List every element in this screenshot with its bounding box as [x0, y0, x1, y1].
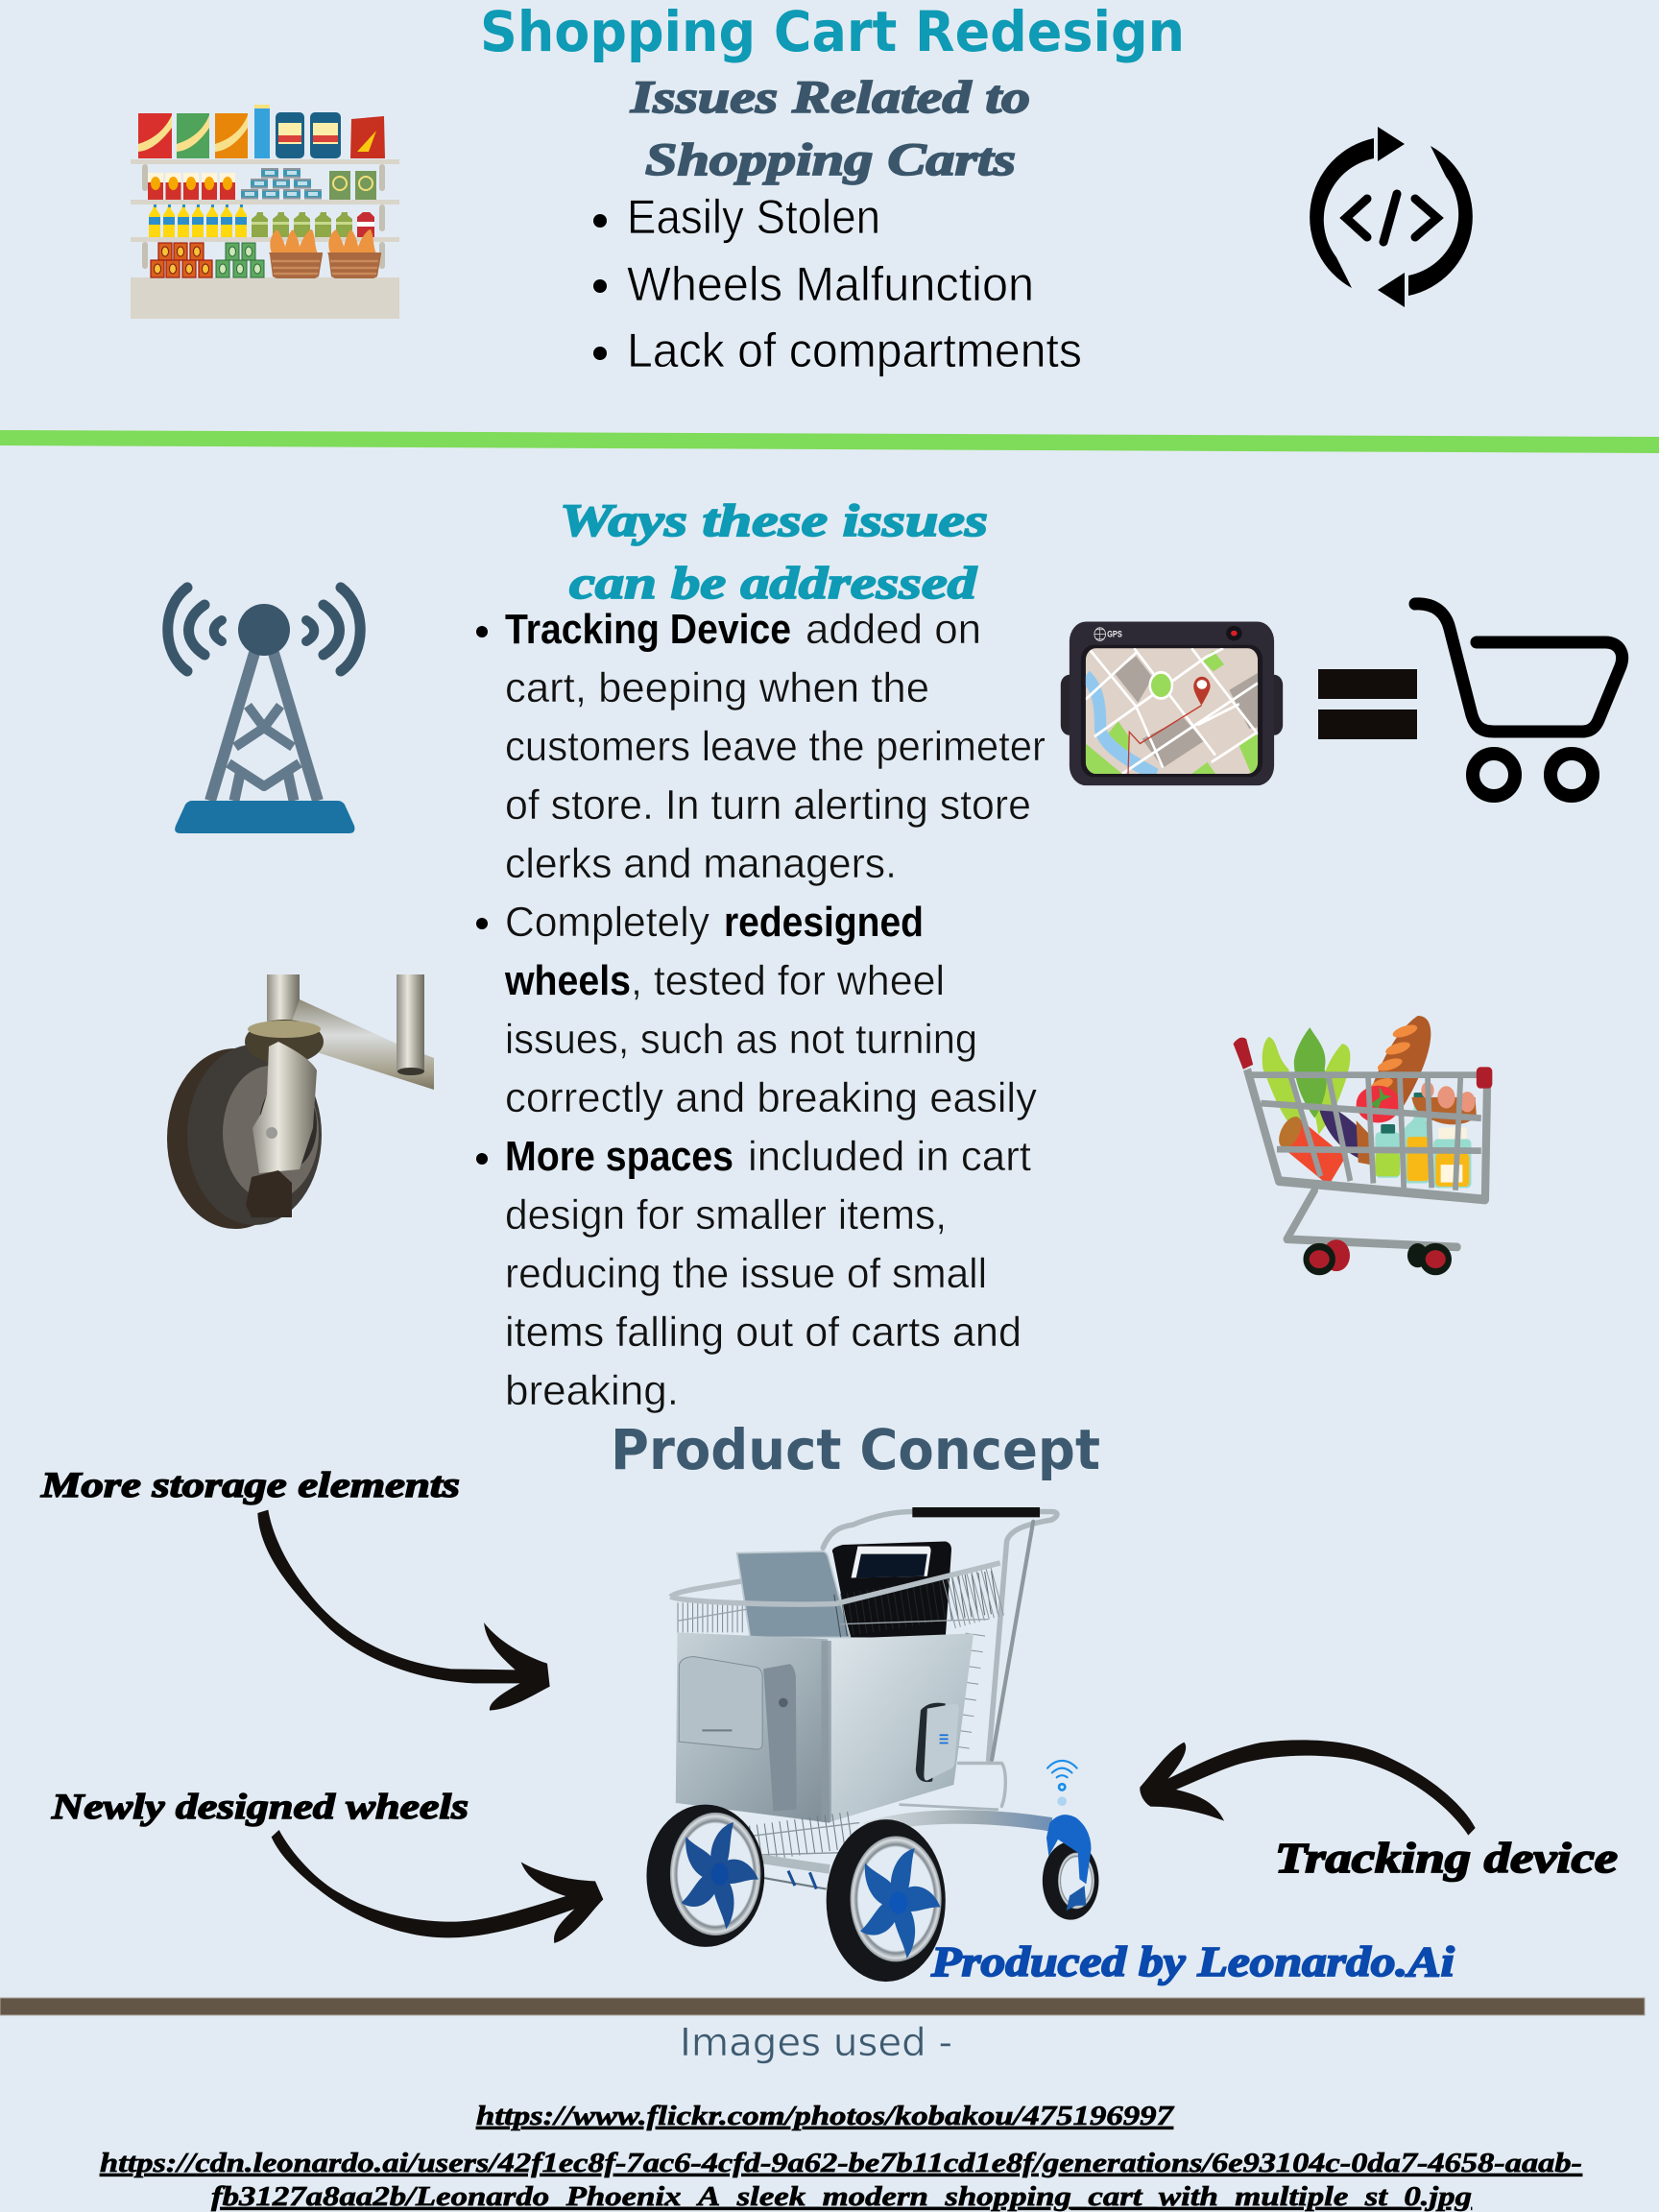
icon: gps device: GPS [1107, 630, 1122, 639]
body text: proposed solutions: customers leave the perimeter [505, 723, 1046, 770]
green divider [0, 430, 1659, 453]
equals sign [1318, 669, 1417, 739]
heading: issues related to shopping carts: Issues Related to [630, 72, 1030, 123]
body text: proposed solutions: breaking. [505, 1367, 679, 1414]
body text: proposed solutions: of store. In turn alerting store [505, 781, 1031, 829]
image source links [100, 2102, 1582, 2212]
rear handle frame [823, 1511, 1057, 1806]
front wheel right [827, 1819, 946, 1982]
heading: issues related to shopping carts [630, 72, 1030, 185]
wire basket [671, 1563, 1000, 1753]
illustration: caster wheel [167, 974, 434, 1229]
heading: ways these issues can be addressed: Ways these issues [560, 495, 988, 546]
icon: gps device [1061, 622, 1283, 785]
rear wheel left [646, 1805, 764, 1947]
body text: proposed solutions: , tested for wheel [631, 957, 945, 1004]
body text: proposed solutions: issues, such as not turning [505, 1016, 977, 1063]
stored tablets [737, 1542, 951, 1638]
list: issues: Wheels Malfunction [627, 257, 1034, 311]
body text: proposed solutions: reducing the issue of small [505, 1250, 987, 1297]
heading: issues related to shopping carts: Shopping Carts [645, 134, 1016, 185]
heading: images used: Images used - [680, 2021, 952, 2065]
arrow: wheels to cart [272, 1830, 603, 1943]
body text: proposed solutions: Tracking Device [505, 606, 791, 653]
arrow: storage to cart [257, 1510, 550, 1711]
body text: proposed solutions: correctly and breaking easily [505, 1074, 1037, 1121]
label: tracking device: Tracking device [1275, 1835, 1618, 1882]
icon: code refresh cycle [1310, 127, 1473, 307]
body text: proposed solutions [476, 606, 1046, 1414]
list: issues: Lack of compartments [627, 324, 1082, 377]
heading: ways these issues can be addressed [560, 495, 988, 609]
brown divider [0, 1998, 1645, 2015]
illustration: store shelves with products [131, 105, 399, 319]
body text: proposed solutions: clerks and managers. [505, 840, 897, 887]
body text: proposed solutions: wheels [504, 957, 631, 1004]
lower rack and frame [684, 1805, 1051, 1889]
heading: product concept: Product Concept [611, 1417, 1100, 1482]
list: issues: Easily Stolen [627, 190, 880, 244]
image source links: https://www.flickr.com/photos/kobakou/475196997 [476, 2102, 1174, 2131]
label: more storage elements: More storage elements [40, 1466, 460, 1505]
silver storage body [676, 1632, 974, 1823]
list: issues [593, 190, 1082, 377]
title: Shopping Cart Redesign [480, 0, 1185, 64]
label: newly designed wheels: Newly designed wheels [51, 1788, 469, 1827]
caster wheel and wifi signal [1043, 1761, 1098, 1920]
body text: proposed solutions: items falling out of carts and [505, 1309, 1022, 1356]
body text: proposed solutions: cart, beeping when the [505, 664, 929, 711]
arrow: tracking device to cart [1140, 1740, 1476, 1836]
illustration: grocery cart [1234, 1016, 1492, 1272]
illustration: concept shopping cart [646, 1511, 1098, 1982]
image source links: https://cdn.leonardo.ai/users/42f1ec8f-7ac6-4cfd-9a62-be7b11cd1e8f/generations/6e93104c-0da7-4658-aaab- [100, 2149, 1582, 2178]
body text: proposed solutions: redesigned [724, 899, 924, 946]
body text: proposed solutions: included in cart [748, 1133, 1031, 1180]
side pocket [679, 1657, 797, 1812]
body text: proposed solutions: Completely [505, 899, 709, 946]
body text: proposed solutions: More spaces [505, 1133, 733, 1180]
heading: ways these issues can be addressed: can be addressed [569, 558, 977, 609]
icon: shopping cart outline [1415, 604, 1623, 796]
body text: proposed solutions: added on [805, 606, 981, 653]
icon: signal tower [168, 588, 360, 833]
tracker module [916, 1703, 959, 1782]
body text: proposed solutions: design for smaller items, [505, 1191, 947, 1238]
credit: produced by leonardo.ai: Produced by Leonardo.Ai [930, 1938, 1455, 1985]
image source links: fb3127a8aa2b/Leonardo_Phoenix_A_sleek_modern_shopping_cart_with_multiple_st_0.jpg [211, 2182, 1472, 2212]
